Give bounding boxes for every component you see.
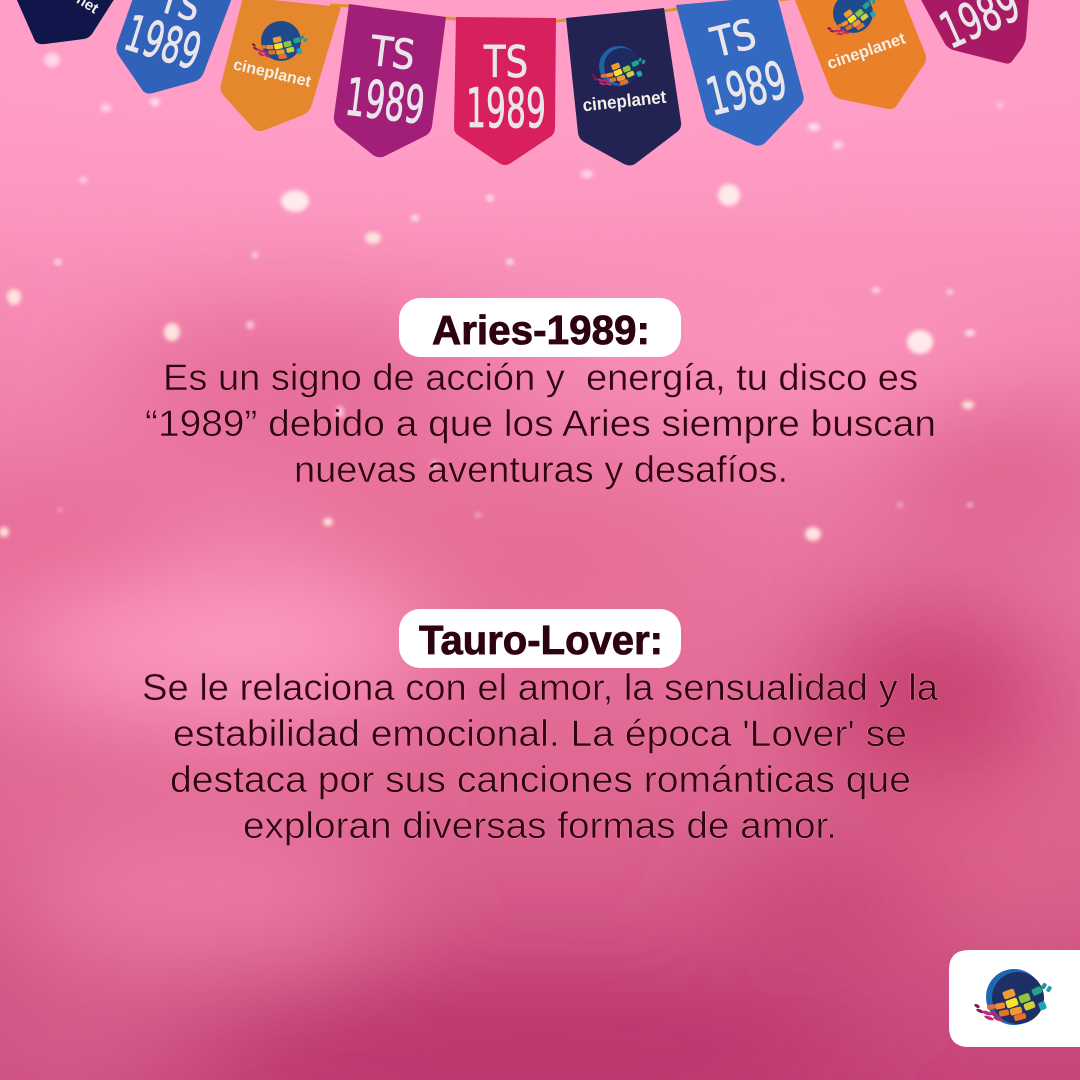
flag: orange cineplanet right: cineplanet: [825, 29, 908, 73]
heading: Aries-1989: [399, 298, 681, 357]
flag: purple TS 1989: TS: [367, 26, 417, 80]
flag: navy cineplanet left: [16, 0, 115, 44]
text block: Tauro description: Se le relaciona con el amor, la sensualidad y la: [142, 666, 938, 708]
text block: Tauro description: [142, 666, 938, 846]
text block: Aries description: Es un signo de acción y energía, tu disco es: [163, 356, 918, 398]
text block: Tauro description: estabilidad emocional. La época 'Lover' se: [173, 712, 907, 754]
flag: crimson TS 1989: TS: [483, 37, 528, 88]
flag: crimson TS 1989: 1989: [466, 77, 546, 140]
flag: blue TS 1989 right: 1989: [701, 51, 793, 128]
text block: Aries description: nuevas aventuras y desafíos.: [294, 448, 788, 490]
text block: Tauro description: destaca por sus canciones románticas que: [170, 758, 911, 800]
flag: blue TS 1989 right: [676, 0, 804, 146]
text block: Aries description: “1989” debido a que los Aries siempre buscan: [145, 402, 936, 444]
bunting string: [330, 0, 795, 21]
flag: orange cineplanet left: cineplanet: [232, 56, 313, 91]
flag: orange cineplanet right: [794, 0, 926, 109]
flag: maroon 1989 right: [920, 0, 1029, 64]
flag: crimson TS 1989: [454, 17, 556, 165]
heading: Tauro-Lover: [399, 609, 681, 668]
text block: Tauro description: exploran diversas formas de amor.: [243, 804, 837, 846]
flag: navy cineplanet centre: [566, 8, 681, 166]
flag: navy cineplanet centre: cineplanet: [582, 87, 667, 115]
heading: Aries-1989: Aries-1989:: [432, 307, 650, 353]
icon: cineplanet globe: [974, 969, 1052, 1025]
flag: blue TS 1989 right: TS: [706, 10, 761, 67]
text block: Aries description: [145, 356, 936, 490]
flag: purple TS 1989: [334, 4, 446, 157]
flag: blue 1989 left: 1989: [118, 4, 208, 82]
sparkles: [0, 53, 1003, 541]
flag: orange cineplanet left: [220, 0, 341, 131]
heading: Tauro-Lover: Tauro-Lover:: [419, 617, 663, 663]
flag: purple TS 1989: 1989: [342, 68, 428, 137]
logo badge: [949, 950, 1080, 1047]
